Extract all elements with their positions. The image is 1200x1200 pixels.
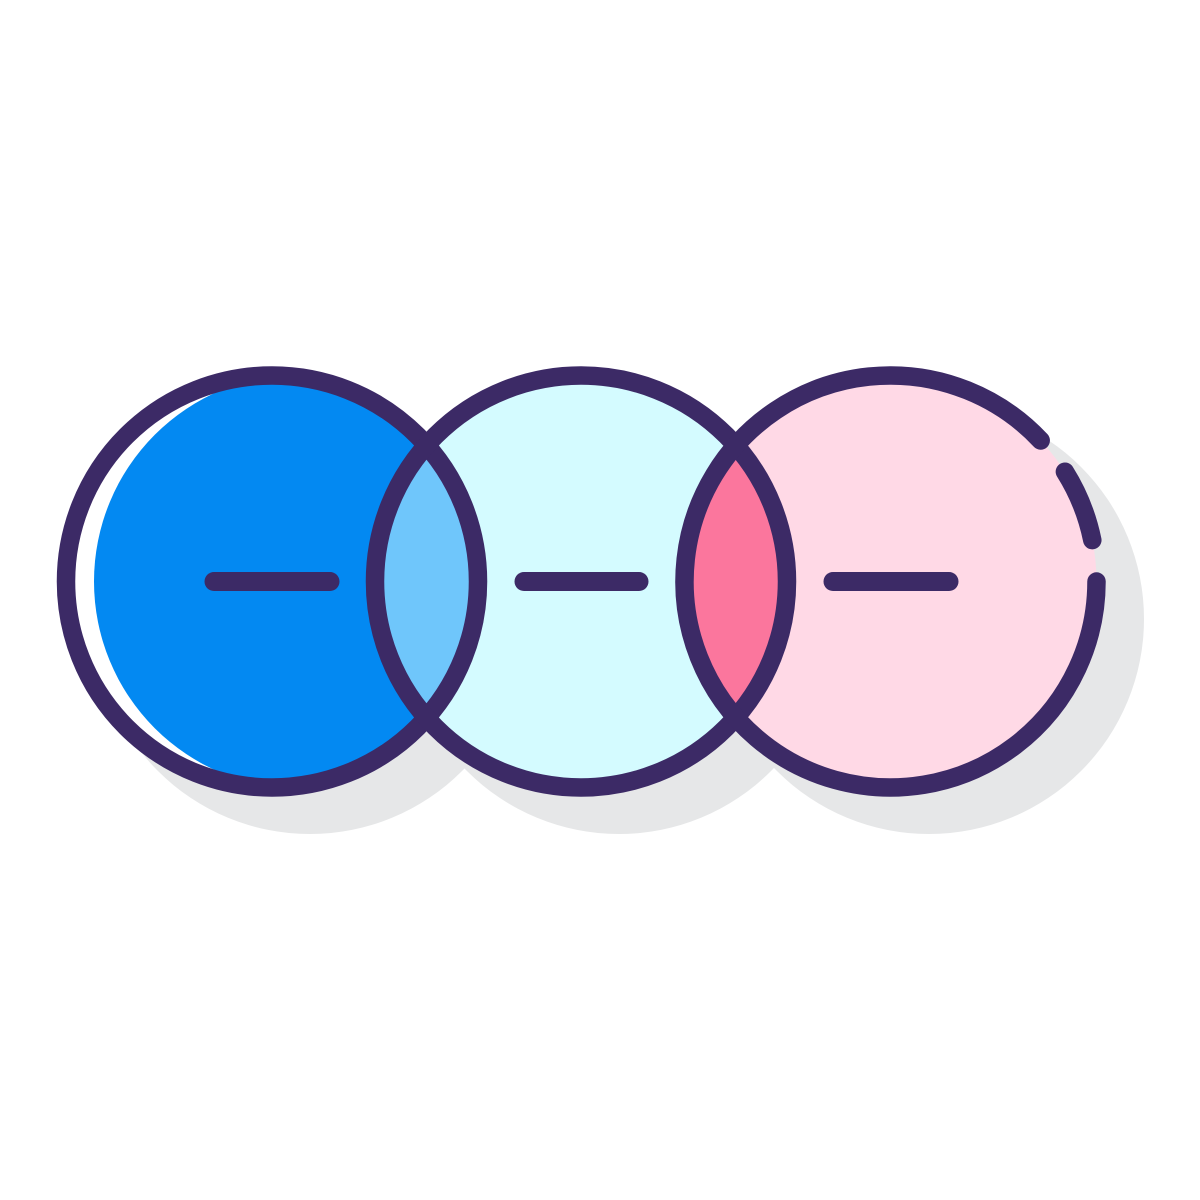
left minus sign xyxy=(214,572,330,591)
left overlap lens xyxy=(375,445,478,718)
middle circle fill xyxy=(375,376,787,788)
right overlap lens xyxy=(684,445,787,718)
middle minus sign xyxy=(524,572,639,591)
left circle outline xyxy=(66,376,478,788)
left circle background xyxy=(66,376,478,788)
left circle blue fill xyxy=(94,384,414,778)
icon: three overlapping circles xyxy=(56,366,1144,834)
right circle fill xyxy=(684,376,1096,788)
drop shadow xyxy=(95,404,1144,834)
right circle dashed outline xyxy=(684,375,1096,787)
right minus sign xyxy=(833,572,949,591)
middle circle outline xyxy=(375,376,787,788)
